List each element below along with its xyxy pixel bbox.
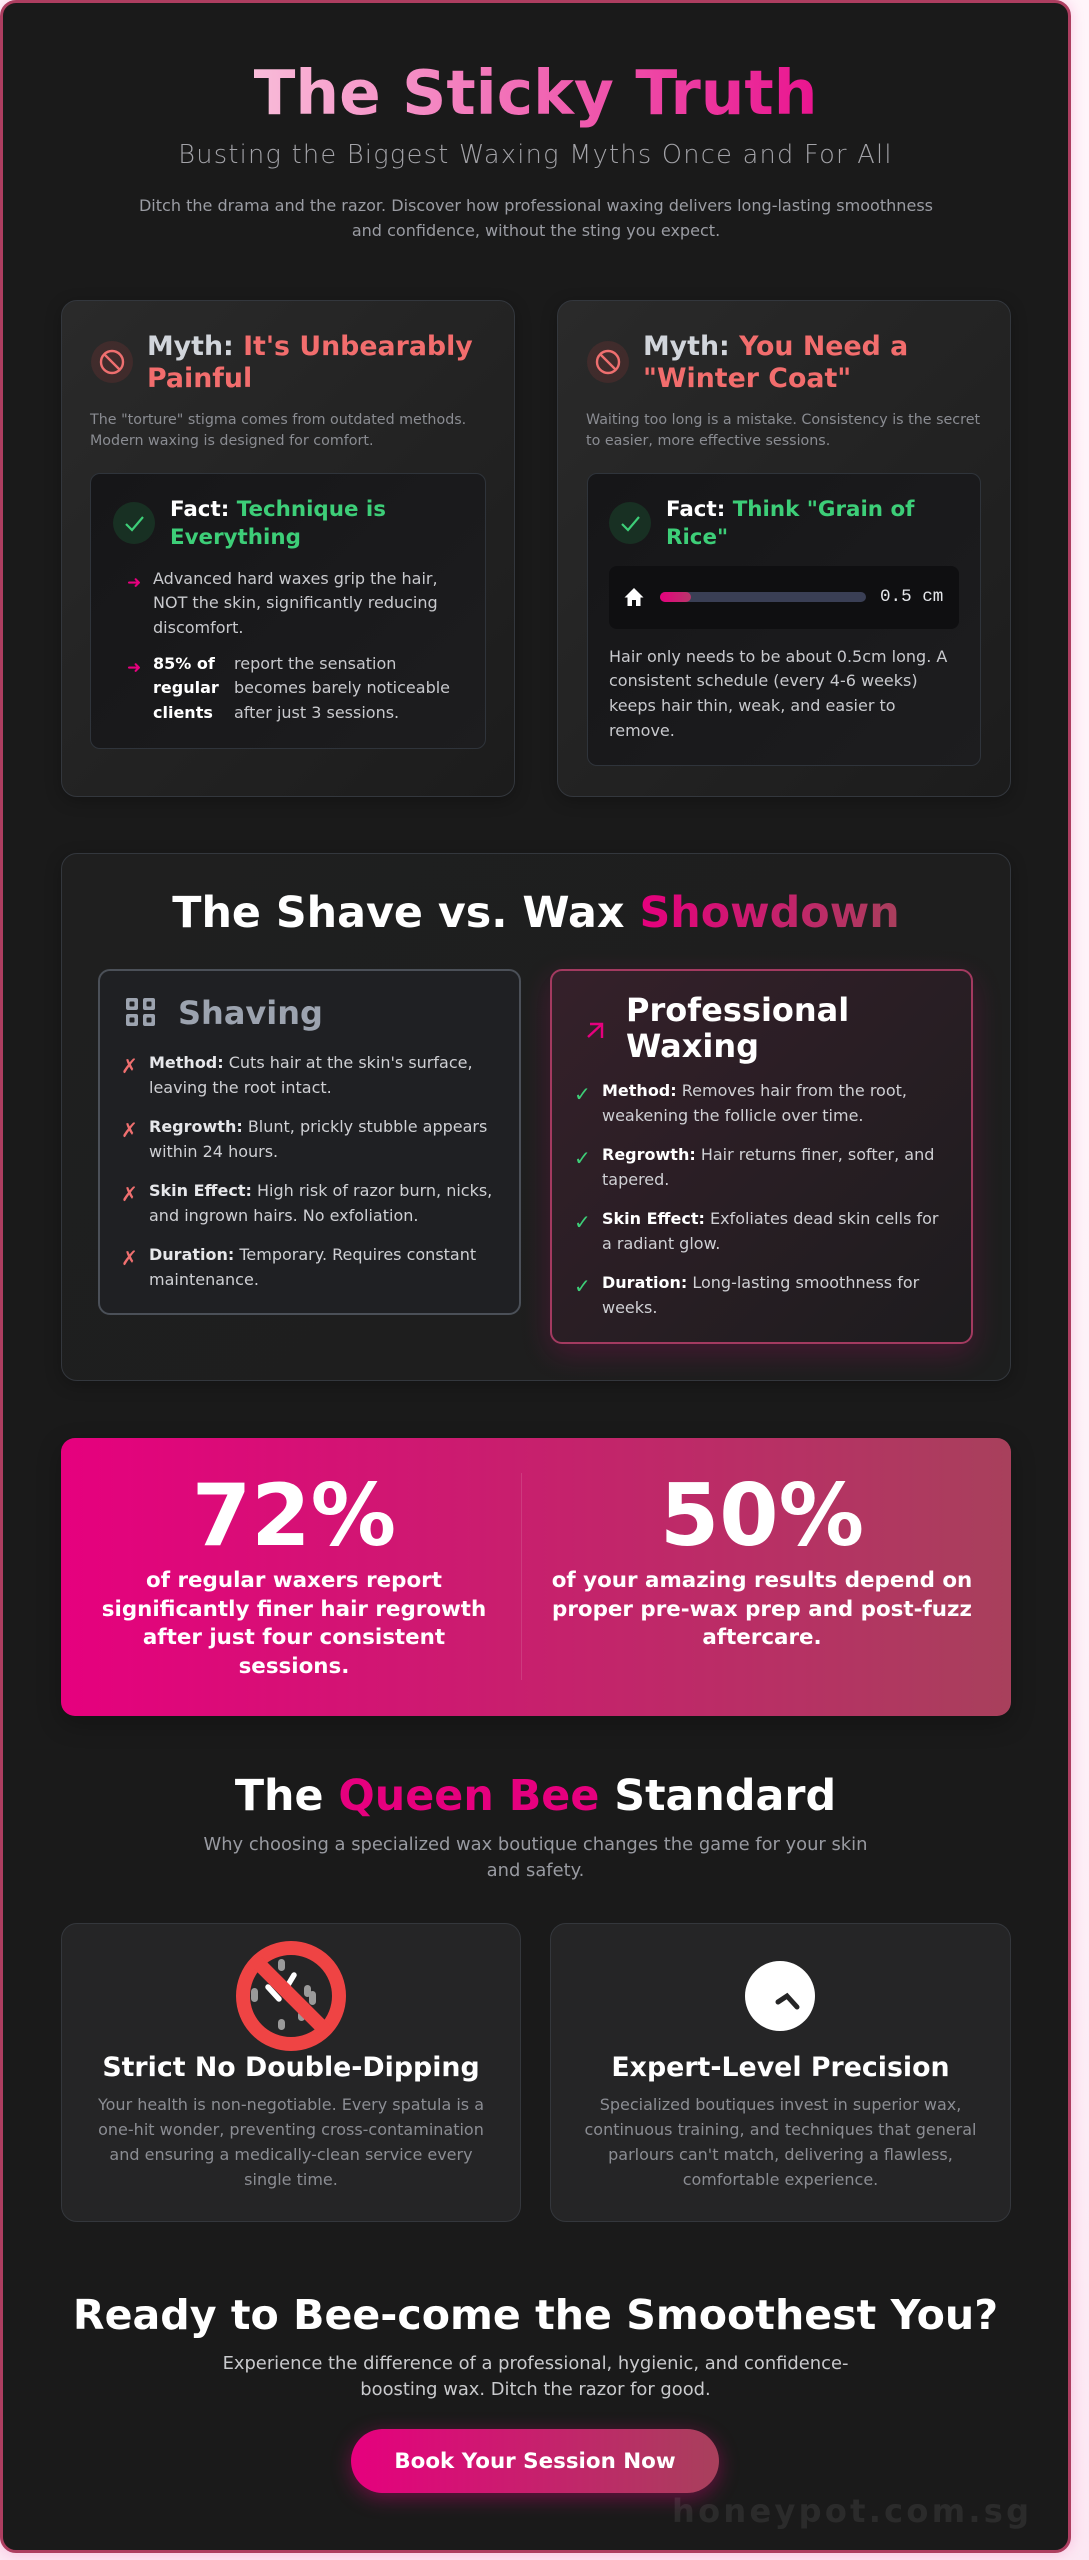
myth 2 description: to easier, more effective sessions.	[586, 433, 830, 449]
waxing: skin effect: a radiant glow.	[602, 1234, 720, 1253]
myth 1 description	[90, 412, 466, 449]
shaving: method: ✗	[121, 1054, 138, 1078]
icon: shaving grid	[126, 998, 155, 1026]
fact 2 heading: Rice"	[666, 525, 728, 550]
myth 2 description	[586, 412, 980, 449]
fact 2 heading	[666, 496, 915, 550]
myth 2 heading: "Winter Coat"	[643, 363, 851, 394]
myth 2 description: Waiting too long is a mistake. Consistency is the secret	[586, 412, 980, 428]
waxing heading: Waxing	[626, 1027, 759, 1065]
myth 1 description: Modern waxing is designed for comfort.	[90, 433, 374, 449]
divider	[521, 1473, 522, 1680]
waxing: skin effect: Skin Effect: Exfoliates dead skin cells for	[602, 1209, 938, 1228]
CTA subtext: boosting wax. Ditch the razor for good.	[360, 2379, 711, 2400]
waxing: method: Method: Removes hair from the root,	[602, 1081, 907, 1100]
waxing: duration: Duration: Long-lasting smoothness for	[602, 1273, 919, 1292]
fact 1 point 1: Advanced hard waxes grip the hair,	[153, 568, 438, 588]
stat 50: 50%	[660, 1467, 864, 1566]
myth 1 heading	[147, 331, 473, 394]
double dipping text	[98, 2095, 484, 2189]
myth 2 heading	[643, 331, 908, 394]
panel: no double dipping	[61, 1923, 521, 2222]
CTA subtext	[223, 2353, 848, 2400]
shaving: method: leaving the root intact.	[149, 1078, 332, 1097]
panel: showdown	[61, 853, 1011, 1381]
fact 1 heading	[170, 496, 386, 550]
title: The Sticky Truth	[254, 58, 817, 129]
myth 2 heading: Myth: You Need a	[643, 331, 908, 362]
panel: myth 2	[557, 300, 1011, 797]
watermark: honeypot.com.sg	[672, 2492, 1032, 2530]
waxing: regrowth: Regrowth: Hair returns finer, softer, and	[602, 1145, 934, 1164]
shaving: skin effect: and ingrown hairs. No exfoliation.	[149, 1206, 418, 1225]
fact 2 text	[609, 646, 948, 740]
icon: no double dip	[236, 1941, 346, 2051]
hair length meter	[609, 566, 959, 629]
queen bee subtext: and safety.	[487, 1860, 584, 1881]
expert text: Specialized boutiques invest in superior wax,	[600, 2095, 961, 2114]
queen bee subtext	[204, 1834, 867, 1881]
waxing: skin effect	[574, 1209, 938, 1253]
icon: fact 2 check	[609, 502, 651, 544]
myth 1 heading: Painful	[147, 363, 252, 394]
arrow 2: ➜	[127, 658, 141, 678]
waxing: regrowth: tapered.	[602, 1170, 669, 1189]
fact 1 point 1: NOT the skin, significantly reducing	[153, 593, 438, 612]
double dipping text: one-hit wonder, preventing cross-contamination	[98, 2120, 484, 2139]
intro text: and confidence, without the sting you expect.	[352, 221, 720, 240]
icon: white chevron circle	[745, 1961, 815, 2031]
shaving: regrowth: within 24 hours.	[149, 1142, 278, 1160]
waxing: skin effect: ✓	[574, 1210, 591, 1234]
arrow 1: ➜	[127, 573, 141, 593]
fact 1 point 2 bold: 85% of	[153, 654, 215, 672]
CTA subtext: Experience the difference of a professional, hygienic, and confidence-	[223, 2353, 848, 2374]
fact 2 text: consistent schedule (every 4-6 weeks)	[609, 671, 918, 690]
stat 72 text: significantly finer hair regrowth	[102, 1597, 486, 1622]
fact 1 point 2 text	[234, 654, 450, 722]
icon: house	[624, 588, 644, 606]
shaving: regrowth: Regrowth: Blunt, prickly stubble appears	[149, 1116, 487, 1136]
fact 1 point 2 text: after just 3 sessions.	[234, 703, 399, 722]
fact 1 heading: Fact: Technique is	[170, 496, 386, 522]
myth 1 heading: Myth: It's Unbearably	[147, 331, 473, 362]
stat 50 text: aftercare.	[702, 1625, 822, 1650]
stat 72 text: after just four consistent	[143, 1625, 445, 1650]
stat 50 text	[552, 1568, 972, 1650]
waxing heading: Professional	[626, 991, 849, 1029]
meter value: 0.5 cm	[880, 587, 943, 607]
icon: myth 1 ban	[91, 341, 133, 383]
shaving: method: Method: Cuts hair at the skin's surface,	[149, 1053, 473, 1072]
shaving: duration: Duration: Temporary. Requires constant	[149, 1245, 476, 1264]
shaving: duration: maintenance.	[149, 1270, 259, 1289]
shaving: regrowth: ✗	[121, 1118, 138, 1142]
panel: expert precision	[550, 1923, 1011, 2222]
waxing: duration: weeks.	[602, 1298, 657, 1317]
double dipping text: single time.	[244, 2170, 338, 2189]
waxing: method: weakening the follicle over time.	[602, 1106, 864, 1125]
stats banner	[61, 1438, 1011, 1716]
icon: myth 2 ban	[587, 341, 629, 383]
panel: professional waxing	[550, 969, 973, 1344]
expert text: comfortable experience.	[683, 2170, 878, 2189]
fact box 1	[90, 473, 486, 749]
waxing: duration	[574, 1273, 920, 1317]
queen bee subtext: Why choosing a specialized wax boutique changes the game for your skin	[204, 1834, 867, 1855]
stat 72 text	[102, 1568, 486, 1679]
waxing: method	[574, 1081, 907, 1125]
waxing heading	[626, 991, 849, 1065]
expert text	[584, 2095, 976, 2189]
stat 72: 72%	[192, 1467, 396, 1566]
shaving: regrowth	[121, 1116, 487, 1160]
shaving: method	[121, 1053, 473, 1097]
double dipping heading: Strict No Double-Dipping	[102, 2052, 480, 2083]
waxing: duration: ✓	[574, 1274, 591, 1298]
panel: myth 1	[61, 300, 515, 797]
panel: shaving	[98, 969, 521, 1315]
fact 1 point 1	[153, 568, 438, 637]
fact 1 heading: Everything	[170, 525, 301, 550]
expert heading: Expert-Level Precision	[611, 2052, 950, 2083]
waxing: regrowth	[574, 1145, 934, 1189]
fact 1 point 2 bold: regular	[153, 678, 219, 697]
fact 1 point 2 bold	[153, 654, 219, 722]
expert text: continuous training, and techniques that general	[584, 2120, 976, 2139]
fact 1 point 1: discomfort.	[153, 618, 243, 637]
stat 72 text: of regular waxers report	[146, 1568, 442, 1593]
shaving: skin effect: ✗	[121, 1182, 138, 1206]
expert text: parlours can't match, delivering a flawless,	[608, 2145, 953, 2164]
fact 2 text: keeps hair thin, weak, and easier to	[609, 696, 896, 715]
shaving: skin effect: Skin Effect: High risk of razor burn, nicks,	[149, 1181, 492, 1200]
shaving heading: Shaving	[178, 994, 323, 1032]
shaving: duration	[121, 1245, 476, 1289]
fact 1 point 2 text: becomes barely noticeable	[234, 678, 450, 697]
fact 2 text: remove.	[609, 721, 675, 740]
icon: fact 1 check	[113, 502, 155, 544]
stat 50 text: proper pre-wax prep and post-fuzz	[552, 1597, 972, 1622]
icon: up-right arrow	[587, 1022, 604, 1038]
shaving: skin effect	[121, 1181, 492, 1225]
intro text: Ditch the drama and the razor. Discover how professional waxing delivers long-lasting smoothness	[139, 196, 933, 215]
stat 50 text: of your amazing results depend on	[552, 1568, 972, 1593]
fact 1 point 2 text: report the sensation	[234, 654, 396, 672]
fact box 2	[587, 473, 981, 766]
CTA heading: Ready to Bee-come the Smoothest You?	[73, 2291, 998, 2339]
queen bee heading: The Queen Bee Standard	[235, 1771, 836, 1821]
stat 72 text: sessions.	[239, 1654, 349, 1679]
intro text	[139, 196, 933, 240]
waxing: regrowth: ✓	[574, 1146, 591, 1170]
myth 1 description: The "torture" stigma comes from outdated methods.	[90, 412, 466, 428]
fact 2 heading: Fact: Think "Grain of	[666, 496, 914, 522]
fact 1 point 2 bold: clients	[153, 703, 213, 722]
subtitle: Busting the Biggest Waxing Myths Once and For All	[178, 140, 893, 170]
CTA button: Book Your Session Now	[394, 2449, 676, 2474]
fact 2 text: Hair only needs to be about 0.5cm long. A	[609, 646, 947, 666]
CTA button	[351, 2429, 719, 2493]
shaving: duration: ✗	[121, 1246, 138, 1270]
double dipping text: Your health is non-negotiable. Every spatula is a	[98, 2095, 484, 2114]
showdown heading: The Shave vs. Wax Showdown	[172, 888, 900, 938]
waxing: method: ✓	[574, 1082, 591, 1106]
double dipping text: and ensuring a medically-clean service every	[109, 2145, 473, 2164]
meter track	[660, 592, 866, 602]
